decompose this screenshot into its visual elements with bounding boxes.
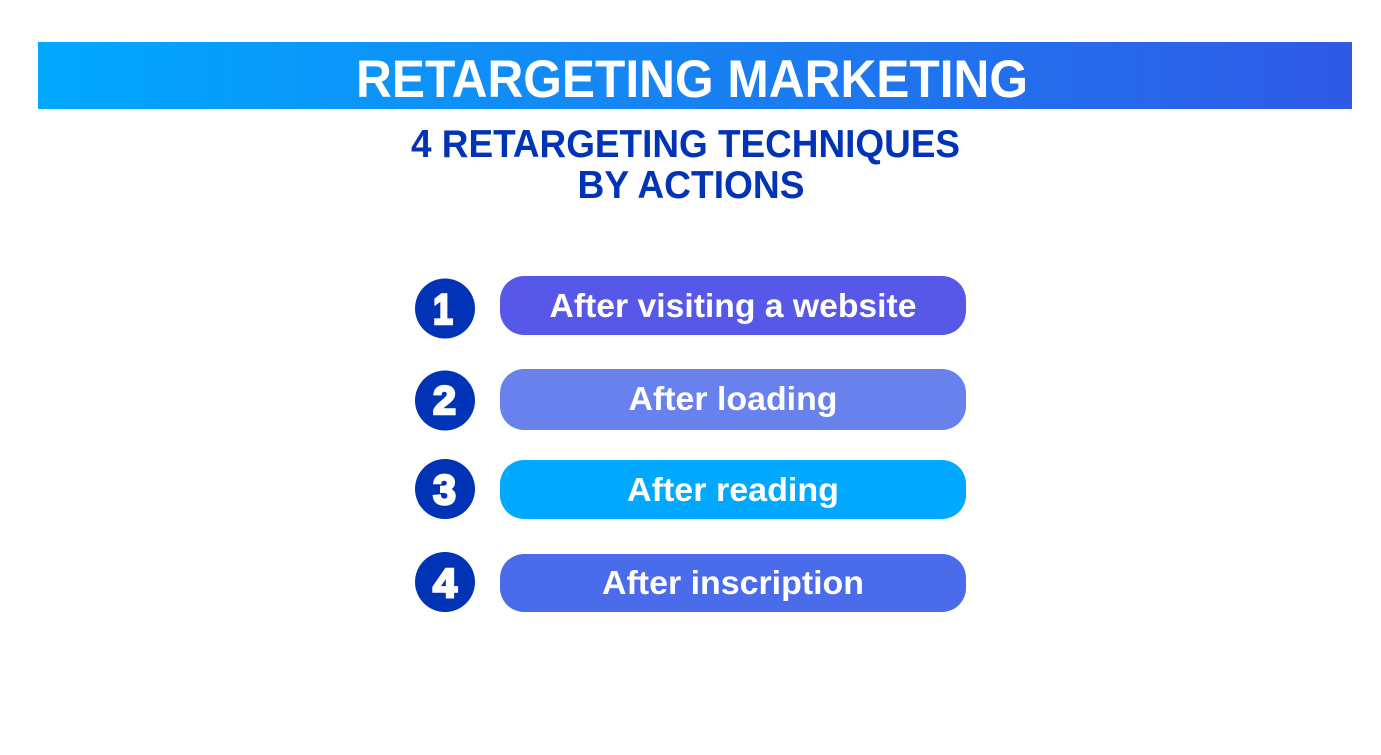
subtitle: BY ACTIONS <box>578 164 804 207</box>
pill 3 <box>500 460 966 519</box>
number badge 4: 4 <box>433 560 457 606</box>
item 1: after visiting a website <box>415 276 966 338</box>
pill 1: After visiting a website <box>550 287 916 324</box>
pill 2 <box>500 369 966 430</box>
item 2: after loading <box>415 369 966 430</box>
pill 3: After reading <box>627 471 839 508</box>
number badge 2: 2 <box>433 379 456 423</box>
pill 2: After loading <box>628 380 838 417</box>
item 3: after reading <box>415 459 966 519</box>
pill 1 <box>500 276 966 335</box>
subtitle <box>411 123 960 207</box>
subtitle: 4 RETARGETING TECHNIQUES <box>411 123 960 166</box>
number badge 1 <box>415 278 475 338</box>
title banner <box>38 42 1352 109</box>
number badge 3 <box>415 459 475 519</box>
number badge 4 <box>415 552 475 612</box>
pill 4 <box>500 554 966 612</box>
number badge 1: 1 <box>433 286 453 334</box>
pill 4: After inscription <box>602 564 864 601</box>
number badge 3: 3 <box>433 466 456 513</box>
number badge 2 <box>415 370 475 430</box>
title: RETARGETING MARKETING <box>356 50 1028 109</box>
item 4: after inscription <box>415 552 966 612</box>
